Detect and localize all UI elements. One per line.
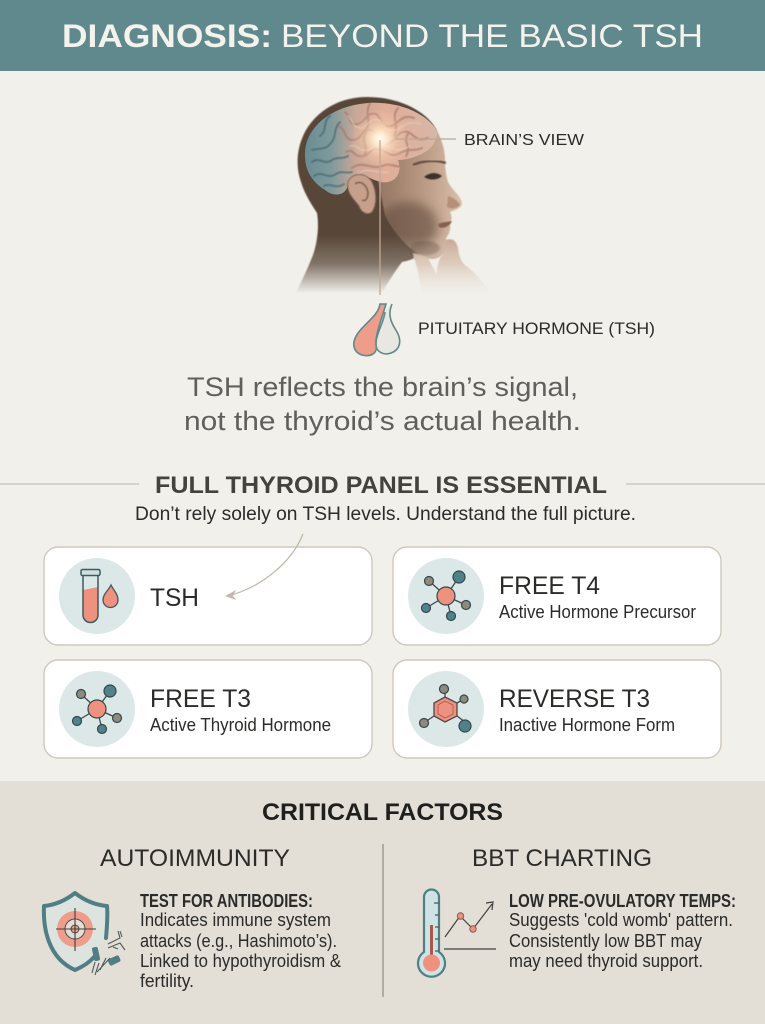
panel: critical factors	[0, 781, 765, 1024]
card: free T4	[393, 547, 721, 645]
column: autoimmunity	[44, 845, 341, 991]
text: test for antibodies: attacks (e.g., Hashimoto’s).	[140, 931, 337, 951]
text: low pre-ovulatory temps	[509, 891, 736, 971]
card label: REVERSE T3	[499, 685, 650, 713]
card label: Inactive Hormone Form	[499, 715, 675, 735]
facial features	[413, 161, 460, 228]
statement text	[184, 372, 581, 436]
card label	[499, 572, 696, 622]
brain	[305, 103, 437, 195]
subheading: Don’t rely solely on TSH levels. Understand the full picture.	[135, 504, 636, 525]
illustration: head profile with brain	[296, 97, 490, 295]
icon: test tube and drop	[81, 570, 118, 623]
icon: pituitary gland	[354, 304, 400, 356]
column divider	[382, 844, 384, 997]
title	[62, 18, 703, 54]
connector: brain to label	[396, 138, 456, 140]
text: test for antibodies: fertility.	[140, 971, 194, 991]
header banner	[0, 0, 765, 71]
icon: molecule	[422, 571, 470, 620]
arrow: subheading to TSH	[225, 534, 303, 600]
icon: thermometer with chart	[418, 890, 496, 977]
card: TSH	[44, 547, 372, 645]
card label: FREE T4	[499, 572, 600, 600]
card label	[150, 685, 331, 735]
statement text: not the thyroid’s actual health.	[184, 406, 581, 436]
label: pituitary hormone: PITUITARY HORMONE (TSH)	[418, 319, 655, 338]
icon: hexagon molecule	[420, 684, 471, 732]
card label	[499, 685, 675, 735]
icon: molecule	[72, 685, 122, 734]
brain glow	[350, 109, 410, 169]
text: low pre-ovulatory temps: Suggests 'cold womb' pattern.	[509, 910, 733, 930]
subheading: autoimmunity: AUTOIMMUNITY	[100, 845, 290, 872]
beard shadow	[378, 202, 438, 250]
card: free T3	[44, 660, 372, 758]
text: test for antibodies	[140, 891, 341, 991]
card: reverse T3	[393, 660, 721, 758]
text: test for antibodies: Indicates immune system	[140, 910, 331, 930]
heading: full thyroid panel: FULL THYROID PANEL IS ESSENTIAL	[155, 472, 607, 499]
card label: FREE T3	[150, 685, 251, 713]
text: test for antibodies: Linked to hypothyroidism &	[140, 951, 341, 971]
connector: brain to pituitary	[379, 140, 381, 295]
subheading: BBT charting: BBT CHARTING	[472, 845, 652, 872]
icon: shield with target and antibodies	[44, 893, 125, 975]
section divider lines	[0, 483, 765, 485]
card label: TSH	[150, 584, 199, 612]
title: DIAGNOSIS:	[62, 18, 272, 54]
title: BEYOND THE BASIC TSH	[281, 18, 703, 54]
ear	[348, 174, 376, 214]
column: BBT charting	[418, 845, 736, 977]
card label: Active Thyroid Hormone	[150, 715, 331, 735]
statement text: TSH reflects the brain’s signal,	[187, 372, 578, 402]
text: test for antibodies: TEST FOR ANTIBODIES:	[140, 891, 313, 911]
text: low pre-ovulatory temps: may need thyroid support.	[509, 951, 703, 971]
card label: Active Hormone Precursor	[499, 602, 696, 622]
label: brain's view: BRAIN’S VIEW	[464, 132, 585, 149]
text: low pre-ovulatory temps: Consistently low BBT may	[509, 931, 702, 951]
heading: critical factors: CRITICAL FACTORS	[262, 799, 503, 826]
